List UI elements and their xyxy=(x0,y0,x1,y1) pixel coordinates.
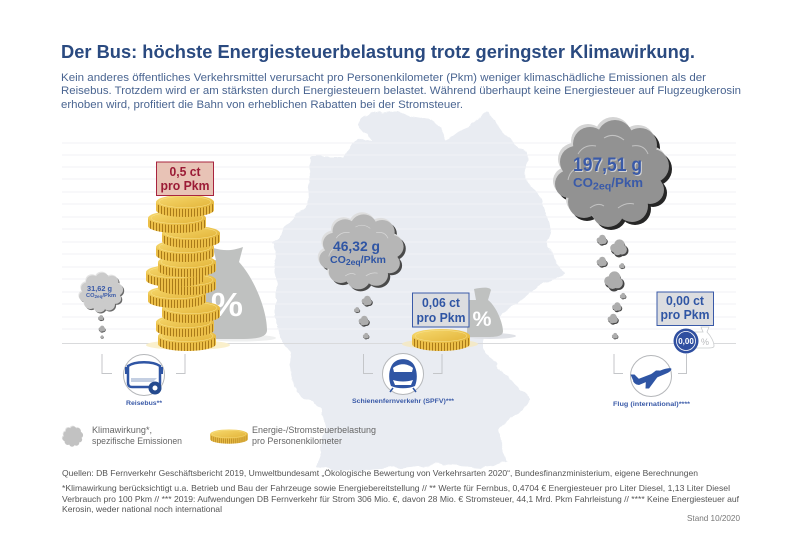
icon: money sack xyxy=(464,288,516,339)
icon: money sack: % xyxy=(211,286,243,323)
cloud: 197,51 g: 197,51 g xyxy=(573,155,642,176)
value box: 0,5 ct: pro Pkm xyxy=(160,179,210,193)
value box: 0,00 ct: 0,00 ct xyxy=(666,294,705,308)
intro text: Kein anderes öffentliches Verkehrsmittel verursacht pro Personenkilometer (Pkm) weniger klimaschädliche Emissionen als der xyxy=(61,72,706,84)
cloud: 46,32 g: CO xyxy=(330,254,346,266)
value box: 0,00 ct xyxy=(657,292,714,326)
cloud: 31,62 g: CO xyxy=(86,293,94,299)
badge: 0,00: 0,00 xyxy=(678,337,694,346)
label: Schienenfernverkehr: Schienenfernverkehr (SPFV)*** xyxy=(352,398,454,405)
value box: 0,06 ct: 0,06 ct xyxy=(422,296,461,310)
cloud: 46,32 g: 2eq xyxy=(346,257,361,267)
sources: Quellen: DB Fernverkehr Geschäftsbericht 2019, Umweltbundesamt „Ökologische Bewertung von Verkehrsarten 2020“, Bundesfinanzministerium, eigene Berechnungen xyxy=(62,468,698,478)
badge: 0,00 xyxy=(674,328,698,354)
cloud: 31,62 g: 2eq xyxy=(94,294,103,299)
icon: money sack: % xyxy=(472,308,492,331)
value box: 0,06 ct xyxy=(412,293,469,327)
footnotes: Kerosin, weder national noch international xyxy=(62,504,222,514)
legend: coin xyxy=(210,425,376,446)
map of Germany xyxy=(273,112,563,470)
icon: plane xyxy=(630,356,672,396)
cloud: 31,62 g: /Pkm xyxy=(102,293,116,299)
icon: small money sack: % xyxy=(701,337,709,347)
cloud: 46,32 g xyxy=(318,212,406,339)
footnotes xyxy=(62,483,740,514)
cloud: 31,62 g xyxy=(78,272,124,339)
footnotes: *Klimawirkung berücksichtigt u.a. Betrieb und Bau der Fahrzeuge sowie Energiebereitstellung // ** Werte für Fernbus, 0,4704 € Energiesteuer pro Liter Diesel, 1,13 Liter Diesel xyxy=(62,483,730,493)
title: Der Bus: höchste Energiesteuerbelastung trotz geringster Klimawirkung. xyxy=(61,41,695,62)
cloud: 197,51 g: 2eq xyxy=(593,180,611,192)
bracket xyxy=(102,354,185,374)
legend: coin: Energie-/Stromsteuerbelastung xyxy=(252,425,376,435)
value box: 0,00 ct: pro Pkm xyxy=(660,308,710,322)
label: Flug: Flug (international)**** xyxy=(613,401,690,408)
bracket xyxy=(364,354,442,374)
bracket xyxy=(614,354,686,374)
intro text: Reisebus. Trotzdem wird er am stärksten durch Energiesteuern belastet. Während überhaupt keine Energiesteuer auf Flugzeugkerosin xyxy=(61,85,741,97)
legend: coin: pro Personenkilometer xyxy=(252,436,342,446)
icon: bus xyxy=(124,354,164,396)
date: Stand 10/2020 xyxy=(687,513,740,523)
cloud: 46,32 g: 46,32 g xyxy=(333,238,380,254)
value box: 0,06 ct: pro Pkm xyxy=(416,311,466,325)
legend: cloud: spezifische Emissionen xyxy=(92,436,182,446)
label: Reisebus: Reisebus** xyxy=(126,400,162,407)
cloud: 197,51 g xyxy=(553,117,672,339)
panel: Reisebus xyxy=(78,162,276,407)
panel: Schienenfernverkehr xyxy=(318,212,516,405)
footnotes: Verbrauch pro 100 Pkm // *** 2019: Aufwendungen DB Fernverkehr für Strom 306 Mio. €, davon 28 Mio. € Stromsteuer, 44,1 Mrd. Pkm Fahrleistung // **** Keine Energiesteuer auf xyxy=(62,494,740,504)
legend: cloud: Klimawirkung*, xyxy=(92,425,152,435)
coin xyxy=(402,329,478,351)
cloud: 46,32 g: /Pkm xyxy=(361,254,386,266)
cloud: 197,51 g: /Pkm xyxy=(611,175,643,190)
panel: Flug xyxy=(553,117,714,408)
legend xyxy=(62,425,376,447)
icon: money sack xyxy=(200,247,276,342)
intro text xyxy=(61,72,741,111)
cloud: 197,51 g: CO xyxy=(573,175,592,190)
intro text: erhoben wird, profitiert die Bahn von erheblichen Rabatten bei der Stromsteuer. xyxy=(61,99,463,111)
icon: train xyxy=(382,354,424,394)
legend: cloud xyxy=(62,425,182,447)
coin stack xyxy=(146,195,230,351)
cloud: 31,62 g: 31,62 g xyxy=(87,284,112,293)
value box: 0,5 ct: 0,5 ct xyxy=(170,165,201,179)
cloud: 197,51 g: 197,51 g xyxy=(574,156,643,177)
icon: small money sack xyxy=(694,327,714,348)
value box: 0,5 ct xyxy=(156,162,214,196)
